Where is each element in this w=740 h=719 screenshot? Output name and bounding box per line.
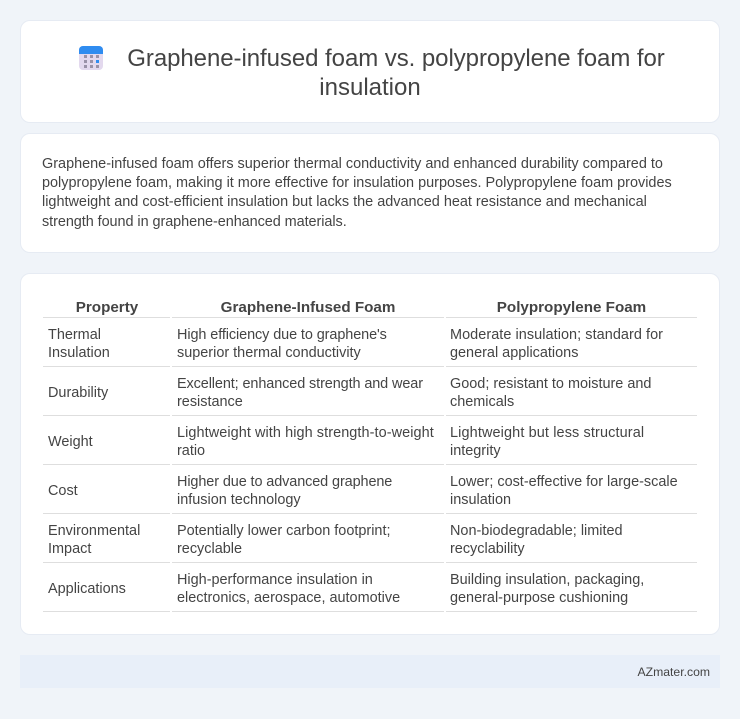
table row: Environmental Impact: Impact (48, 541, 91, 557)
title: Graphene-infused foam vs. polypropylene foam for (127, 45, 665, 72)
table row: Durability (48, 376, 651, 410)
panel: title card (20, 20, 720, 123)
table row: Weight: integrity (450, 443, 501, 459)
table row: Durability: chemicals (450, 394, 514, 410)
table row: Thermal Insulation (48, 327, 663, 361)
text block: summary: lightweight and cost-efficient insulation but lacks the advanced heat resistance and mechanical (42, 194, 647, 210)
table row: Thermal Insulation: Insulation (48, 345, 110, 361)
table row: Applications: Applications (48, 581, 126, 597)
table row: Environmental Impact: Environmental (48, 523, 140, 539)
table row: Applications: general-purpose cushioning (450, 590, 628, 606)
table row: Weight: Lightweight with high strength-to-weight (177, 425, 434, 441)
table row: Applications: Building insulation, packaging, (450, 572, 644, 588)
table row: Cost: Higher due to advanced graphene (177, 474, 392, 490)
table row: Durability: Durability (48, 385, 108, 401)
table row: Weight: Weight (48, 434, 93, 450)
text block: summary: polypropylene foam, making it more effective for insulation purposes. Polypropylene foam provides (42, 175, 672, 191)
table row: Weight (48, 425, 644, 459)
table row: Cost: Lower; cost-effective for large-scale (450, 474, 678, 490)
table row: Durability: Excellent; enhanced strength and wear (177, 376, 423, 392)
table row: Cost: insulation (450, 492, 511, 508)
table header: Property: Property (76, 299, 138, 316)
table row: Thermal Insulation: superior thermal conductivity (177, 345, 361, 361)
table row: Applications (48, 572, 644, 606)
table row: Thermal Insulation: general applications (450, 345, 578, 361)
title: insulation (319, 74, 421, 101)
text block: summary (42, 156, 672, 230)
table row: Cost: infusion technology (177, 492, 301, 508)
table row: Environmental Impact: recyclable (177, 541, 242, 557)
footer bar (20, 655, 720, 688)
table row: Durability: Good; resistant to moisture and (450, 376, 651, 392)
table header: Graphene-Infused Foam: Graphene-Infused Foam (221, 299, 395, 316)
table row: Environmental Impact: Potentially lower carbon footprint; (177, 523, 390, 539)
table row: Durability: resistance (177, 394, 243, 410)
table row: Cost: Cost (48, 483, 78, 499)
table row: Cost (48, 474, 678, 508)
table row: Weight: Lightweight but less structural (450, 425, 644, 441)
icon: calendar (79, 46, 103, 70)
table row: Weight: ratio (177, 443, 205, 459)
table header: Polypropylene Foam: Polypropylene Foam (497, 299, 646, 316)
table row: Environmental Impact: Non-biodegradable; limited (450, 523, 623, 539)
text block: summary: Graphene-infused foam offers superior thermal conductivity and enhanced durability compared to (42, 156, 663, 172)
table row: Thermal Insulation: Thermal (48, 327, 101, 343)
footer text: AZmater.com: AZmater.com (638, 665, 710, 679)
table row: Environmental Impact: recyclability (450, 541, 525, 557)
table row: Applications: High-performance insulation in (177, 572, 373, 588)
table row: Applications: electronics, aerospace, automotive (177, 590, 400, 606)
text block: summary: strength found in graphene-enhanced materials. (42, 214, 347, 230)
title (127, 45, 665, 101)
table row: Thermal Insulation: Moderate insulation; standard for (450, 327, 663, 343)
table row: Thermal Insulation: High efficiency due to graphene's (177, 327, 387, 343)
panel: summary card (20, 133, 720, 253)
table row: Environmental Impact (48, 523, 623, 557)
panel: comparison table card (20, 273, 720, 635)
